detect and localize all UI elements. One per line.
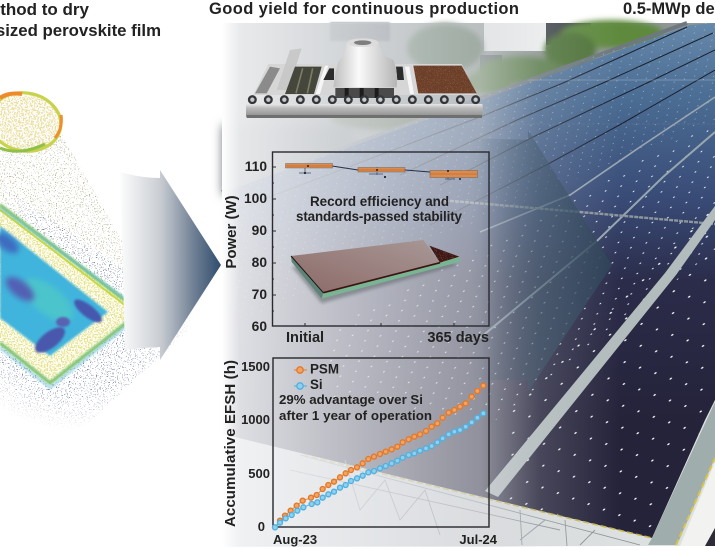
illustration: slot-die coating production line bbox=[246, 38, 483, 118]
photo: rooftop solar array bbox=[222, 20, 715, 546]
legend bbox=[294, 362, 339, 392]
coating dome bbox=[333, 42, 397, 87]
panel field bbox=[222, 23, 715, 538]
lower structure bbox=[222, 400, 715, 546]
coating bed bbox=[253, 64, 477, 95]
roof edge rail bbox=[222, 23, 687, 192]
heading: left column bbox=[0, 0, 161, 40]
y axis labels: 1500 bbox=[241, 359, 270, 374]
y axis labels: 60 bbox=[252, 319, 267, 334]
dome under shadow bbox=[335, 88, 394, 98]
chart: module power stability: 365 days bbox=[427, 330, 489, 346]
left glass sheet bbox=[255, 67, 280, 93]
y axis labels: 80 bbox=[252, 255, 267, 270]
chart: module power stability: standards-passed stability bbox=[296, 209, 463, 224]
legend: PSM bbox=[310, 362, 339, 376]
y axis labels bbox=[241, 359, 270, 534]
x axis labels: Aug-23 bbox=[273, 532, 317, 547]
droplet ring bbox=[0, 87, 65, 157]
yellow edge line bbox=[303, 455, 652, 538]
series: Si bbox=[272, 411, 486, 530]
buildings bbox=[222, 23, 591, 195]
heading: right column: 0.5-MWp de bbox=[623, 0, 715, 18]
tick marks bbox=[272, 167, 454, 326]
rollers bbox=[249, 96, 479, 103]
chart: accumulative EFSH: Jul-24 bbox=[459, 532, 498, 547]
scatter image: droplet ring and perovskite film bbox=[0, 87, 200, 440]
y axis labels: 70 bbox=[252, 287, 267, 302]
y axis labels: 0 bbox=[258, 519, 265, 534]
heading: centre column: Good yield for continuous production bbox=[209, 0, 519, 18]
y axis labels: 100 bbox=[244, 191, 267, 206]
wet film stripes bbox=[285, 67, 322, 94]
heading: left column: sized perovskite film bbox=[0, 21, 161, 40]
y axis title: Accumulative EFSH (h) bbox=[222, 360, 239, 527]
plot frame bbox=[273, 358, 489, 527]
foliage bbox=[330, 20, 664, 130]
arrow: from production to deployment bbox=[470, 130, 612, 392]
chart: accumulative EFSH: after 1 year of operation bbox=[279, 408, 432, 423]
y axis labels: 110 bbox=[245, 159, 267, 174]
chart: accumulative EFSH bbox=[222, 358, 498, 547]
machine base bbox=[246, 104, 483, 117]
callout text: 29% advantage over Si bbox=[279, 392, 423, 407]
panel dots and rows bbox=[222, 23, 715, 538]
truss lines bbox=[290, 455, 640, 546]
brown finished film bbox=[413, 66, 477, 93]
series: PSM bbox=[275, 383, 486, 527]
heading: left column: thod to dry bbox=[0, 0, 90, 19]
film edge band bbox=[0, 203, 142, 385]
arrow: from film to production bbox=[120, 170, 221, 360]
y axis labels: 1000 bbox=[241, 412, 270, 427]
spray cone speckles bbox=[0, 135, 150, 290]
photo sky and ground bbox=[222, 23, 715, 546]
y axis labels: 500 bbox=[248, 466, 270, 481]
y axis title: Power (W) bbox=[223, 195, 240, 269]
illustration: perovskite module bbox=[291, 240, 459, 303]
legend: Si bbox=[310, 377, 323, 392]
y axis labels bbox=[244, 159, 267, 334]
y axis labels: 90 bbox=[252, 223, 267, 238]
chart: module power stability bbox=[223, 152, 489, 346]
silver walkway stripe bbox=[485, 206, 715, 497]
callout text: Record efficiency and bbox=[310, 194, 449, 209]
white fade over photo bbox=[222, 23, 715, 547]
film interior bbox=[0, 226, 108, 357]
halo around film bbox=[0, 185, 200, 440]
plot frame bbox=[272, 152, 489, 326]
box plots bbox=[286, 164, 478, 180]
white roller bbox=[316, 66, 328, 94]
x axis labels: Initial bbox=[286, 330, 324, 346]
